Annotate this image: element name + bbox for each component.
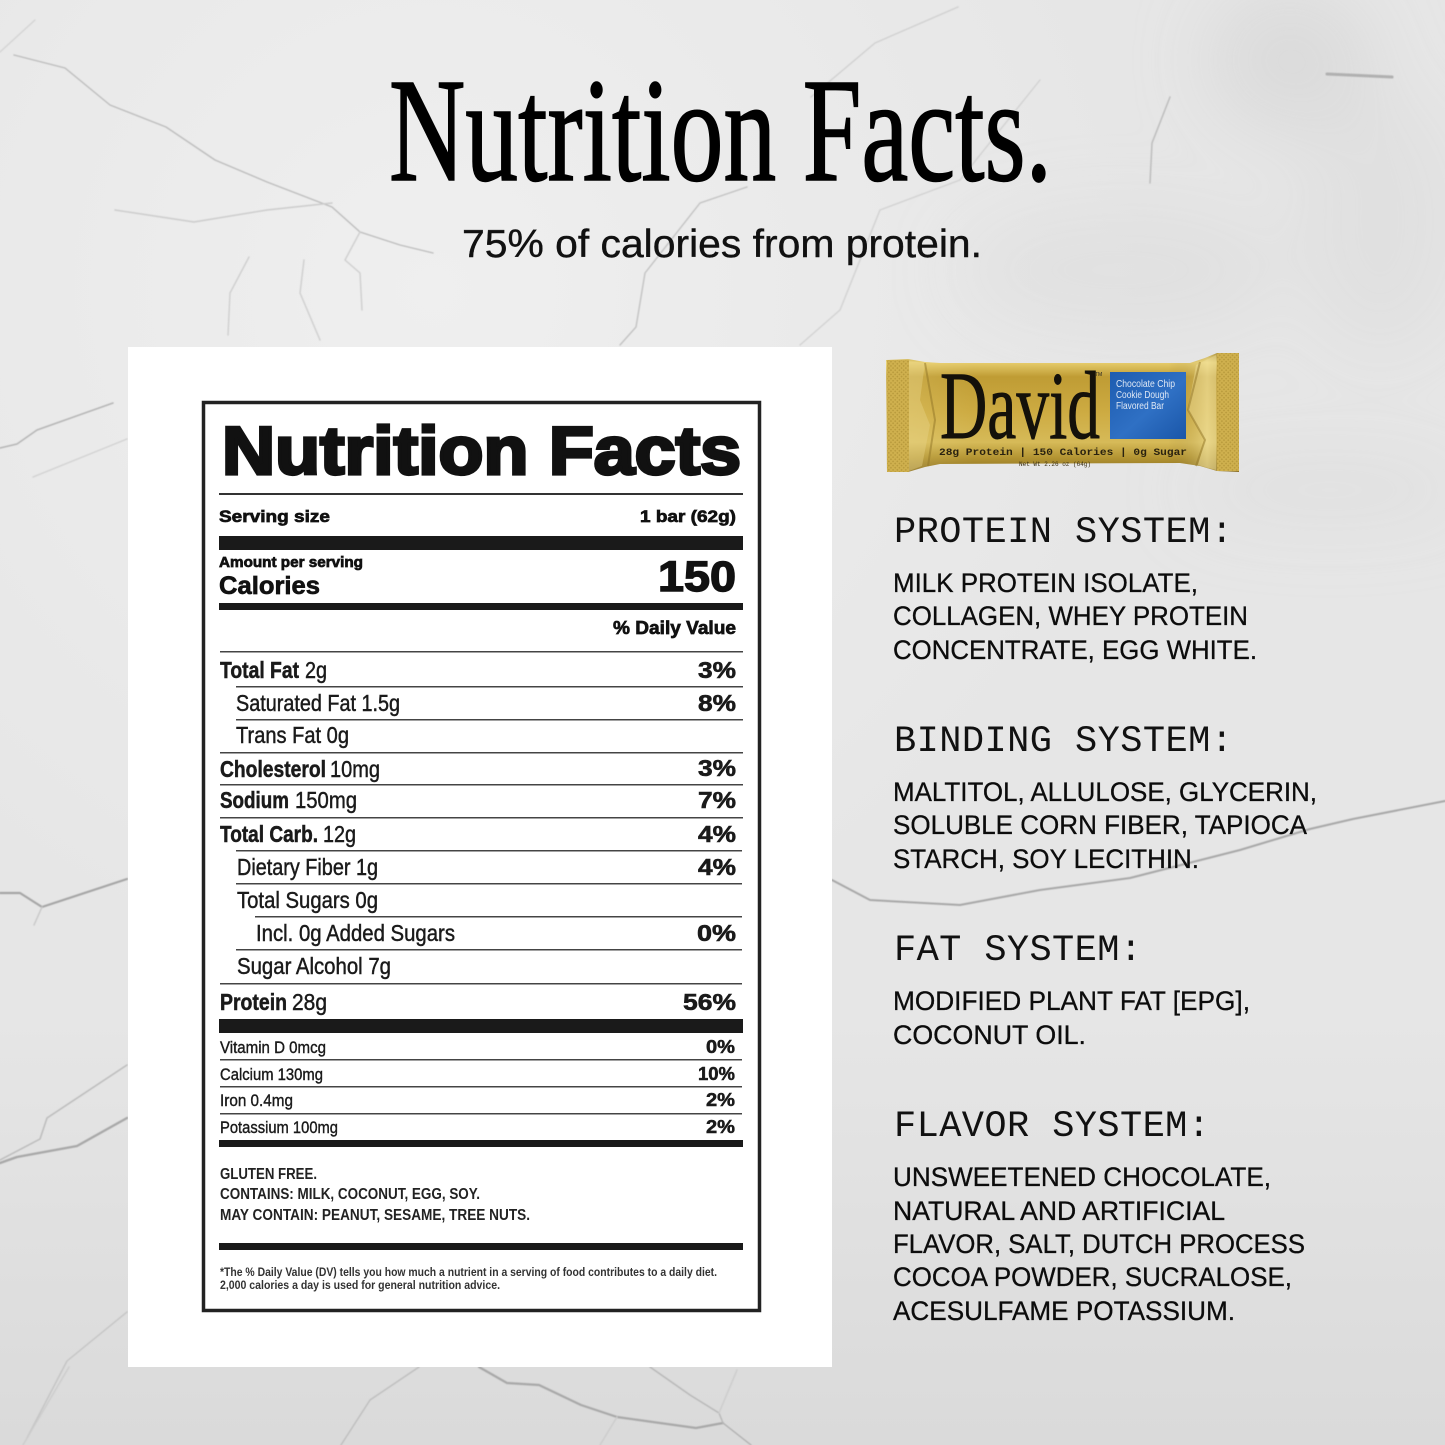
product image: David bar wrapper: Net Wt 2.26 oz (64g) <box>1019 461 1091 468</box>
nutrient rows: Saturated Fat 1.5g <box>236 690 400 716</box>
daily value footnote: *The % Daily Value (DV) tells you how much a nutrient in a serving of food contributes to a daily diet. <box>220 1267 717 1279</box>
ingredient block: protein system: CONCENTRATE, EGG WHITE. <box>893 635 1257 665</box>
vitamin and mineral rows: Vitamin D 0mcg <box>220 1038 326 1057</box>
nutrient rows: Sugar Alcohol 7g <box>237 953 391 979</box>
nutrient rows: Cholesterol <box>220 756 326 782</box>
serving size row: 1 bar (62g) <box>640 507 736 526</box>
product image: David bar wrapper: Cookie Dough <box>1116 390 1169 401</box>
product image: David bar wrapper: 28g Protein | 150 Calories | 0g Sugar <box>939 447 1187 459</box>
allergen statement: GLUTEN FREE. <box>220 1166 317 1183</box>
ingredient block: fat system <box>893 930 1250 1050</box>
ingredient block: flavor system: NATURAL AND ARTIFICIAL <box>893 1196 1225 1226</box>
ingredient block: flavor system: FLAVOR, SALT, DUTCH PROCESS <box>893 1229 1305 1259</box>
nutrient rows: 8% <box>698 690 736 716</box>
vitamin and mineral rows: Iron 0.4mg <box>220 1091 293 1110</box>
ingredient block: binding system: STARCH, SOY LECITHIN. <box>893 844 1199 874</box>
allergen statement: MAY CONTAIN: PEANUT, SESAME, TREE NUTS. <box>220 1207 530 1224</box>
nutrient rows: 10mg <box>330 756 380 782</box>
ingredient block: fat system: MODIFIED PLANT FAT [EPG], <box>893 986 1250 1016</box>
calories row: Calories <box>219 572 320 600</box>
vitamin and mineral rows <box>220 1037 735 1137</box>
nutrient rows: 3% <box>698 657 736 683</box>
ingredient block: binding system: BINDING SYSTEM: <box>894 721 1233 763</box>
title: Nutrition Facts. <box>389 49 1052 213</box>
ingredient block: binding system: MALTITOL, ALLULOSE, GLYCERIN, <box>893 777 1317 807</box>
calories row: Amount per serving <box>219 555 363 571</box>
panel: nutrition label <box>128 347 832 1367</box>
vitamin and mineral rows: Potassium 100mg <box>220 1118 338 1137</box>
daily value footnote <box>220 1267 717 1292</box>
product image: David bar wrapper: Flavored Bar <box>1116 401 1165 412</box>
nutrient rows: Total Carb. <box>220 821 318 847</box>
nutrient rows <box>220 657 736 1015</box>
ingredient block: flavor system: COCOA POWDER, SUCRALOSE, <box>893 1262 1292 1292</box>
label heading: Nutrition Facts <box>222 413 741 489</box>
product image: David bar wrapper <box>886 352 1239 472</box>
nutrient rows: Total Sugars 0g <box>237 887 378 913</box>
allergen statement <box>220 1166 530 1224</box>
calories row <box>219 553 743 610</box>
ingredient block: fat system: FAT SYSTEM: <box>894 930 1142 972</box>
vitamin and mineral rows: 0% <box>706 1037 735 1057</box>
ingredient block: protein system: PROTEIN SYSTEM: <box>894 512 1233 554</box>
ingredient block: protein system: MILK PROTEIN ISOLATE, <box>893 568 1198 598</box>
ingredient block: protein system: COLLAGEN, WHEY PROTEIN <box>893 601 1248 631</box>
ingredient block: protein system <box>893 512 1257 665</box>
calories row: 150 <box>658 553 736 601</box>
nutrient rows: 28g <box>292 989 327 1015</box>
vitamin and mineral rows: 2% <box>706 1117 735 1137</box>
daily value footnote: 2,000 calories a day is used for general nutrition advice. <box>220 1280 500 1292</box>
vitamin and mineral rows: 2% <box>706 1090 735 1110</box>
vitamin and mineral rows: 10% <box>698 1064 735 1084</box>
vitamin and mineral rows: Calcium 130mg <box>220 1065 323 1084</box>
ingredient block: flavor system: FLAVOR SYSTEM: <box>894 1106 1210 1148</box>
ingredient block: flavor system <box>893 1106 1305 1326</box>
nutrient rows: Total Fat <box>220 657 299 683</box>
nutrient rows: 150mg <box>295 787 357 813</box>
rule lines <box>219 651 743 1250</box>
ingredient block: binding system: SOLUBLE CORN FIBER, TAPIOCA <box>893 810 1307 840</box>
nutrient rows: 0% <box>697 920 736 946</box>
nutrient rows: 3% <box>698 755 736 781</box>
nutrient rows: 2g <box>305 657 327 683</box>
nutrient rows: Trans Fat 0g <box>236 722 349 748</box>
nutrient rows: 12g <box>323 821 356 847</box>
serving size row <box>219 493 743 550</box>
ingredient block: fat system: COCONUT OIL. <box>893 1020 1086 1050</box>
nutrient rows: Protein <box>220 989 287 1015</box>
ingredient block: binding system <box>893 721 1317 874</box>
product image: David bar wrapper: David <box>940 352 1100 459</box>
product image: David bar wrapper: Chocolate Chip <box>1116 379 1175 390</box>
nutrient rows: 56% <box>683 989 736 1015</box>
nutrient rows: 4% <box>698 821 736 847</box>
subtitle: 75% of calories from protein. <box>462 223 982 266</box>
daily value heading: % Daily Value <box>613 618 736 638</box>
nutrient rows: 7% <box>698 787 736 813</box>
nutrient rows: 4% <box>698 854 736 880</box>
product image: David bar wrapper: TM <box>1095 372 1102 378</box>
ingredient block: flavor system: UNSWEETENED CHOCOLATE, <box>893 1162 1271 1192</box>
nutrient rows: Sodium <box>220 787 289 813</box>
ingredient block: flavor system: ACESULFAME POTASSIUM. <box>893 1296 1235 1326</box>
nutrient rows: Dietary Fiber 1g <box>237 854 378 880</box>
serving size row: Serving size <box>219 507 330 526</box>
nutrient rows: Incl. 0g Added Sugars <box>256 920 455 946</box>
allergen statement: CONTAINS: MILK, COCONUT, EGG, SOY. <box>220 1186 480 1203</box>
